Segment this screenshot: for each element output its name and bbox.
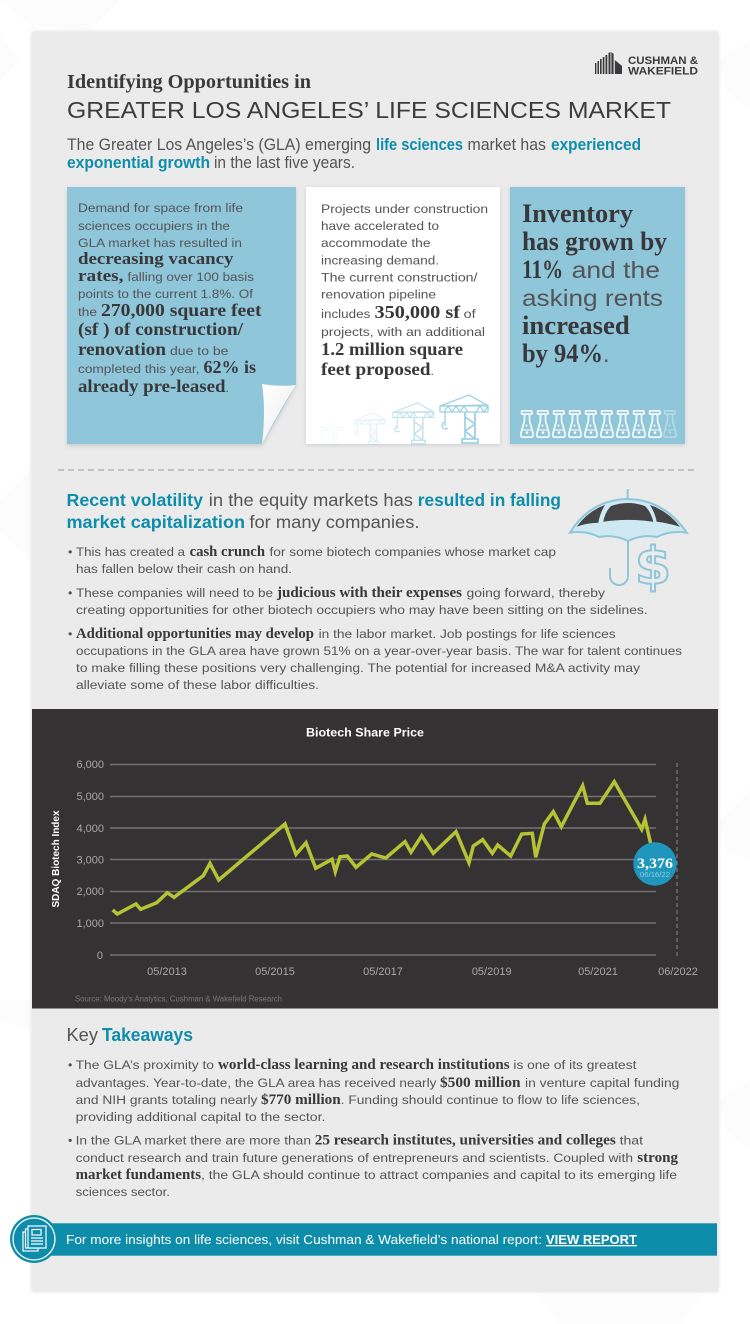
- logo: Cushman & Wakefield: [595, 52, 698, 78]
- panel: vacancy rates note: GLA market has resulted in: [78, 236, 242, 250]
- x axis labels: 05/2013: [147, 966, 187, 978]
- bulleted text: key takeaways: world-class learning and research institutions: [218, 1057, 510, 1073]
- panel: construction pipeline: includes: [321, 307, 370, 321]
- intro text: life sciences: [376, 135, 463, 154]
- bulleted text: market volatility points: •: [68, 545, 72, 559]
- panel: vacancy rates note: renovation: [78, 339, 166, 359]
- bulleted text: market volatility points: in the labor market. Job postings for life sciences: [319, 627, 616, 641]
- y axis gridlines and labels: [76, 759, 656, 962]
- chart panel: biotech share price: [32, 709, 718, 1008]
- bulleted text: key takeaways: and NIH grants totaling nearly: [76, 1093, 258, 1107]
- panel: vacancy rates note: (sf ) of construction/: [78, 319, 244, 339]
- panel: vacancy rates note: [67, 187, 296, 446]
- panel: construction pipeline: accommodate the: [321, 236, 431, 250]
- intro text: The Greater Los Angeles’s (GLA) emerging: [67, 135, 371, 154]
- heading: key takeaways: Key: [66, 1025, 98, 1045]
- bulleted text: key takeaways: •: [68, 1134, 72, 1148]
- bulleted text: key takeaways: . Funding should continue to flow to life sciences,: [341, 1093, 640, 1107]
- bulleted text: key takeaways: , the GLA should continue to attract companies and capital to its emerging life: [201, 1168, 677, 1182]
- intro text: in the last five years.: [214, 153, 355, 172]
- x axis labels: [147, 966, 698, 978]
- panel: inventory and rents: 11%: [522, 255, 563, 284]
- panel: inventory and rents: increased: [522, 311, 630, 340]
- bulleted text: key takeaways: $770 million: [261, 1092, 341, 1108]
- panel: vacancy rates note: falling over 100 basis: [128, 270, 254, 284]
- panel: construction pipeline: of: [464, 307, 476, 321]
- x axis labels: 05/2015: [255, 966, 295, 978]
- heading: recent volatility: market capitalization: [66, 512, 245, 532]
- x axis labels: 05/2021: [578, 966, 618, 978]
- callout: latest value: 06/16/22: [640, 870, 670, 879]
- heading: recent volatility: Recent volatility: [66, 490, 203, 510]
- panel: construction pipeline: .: [430, 364, 434, 378]
- panel: inventory and rents: .: [603, 341, 609, 367]
- panel: vacancy rates note: the: [78, 305, 97, 319]
- panel: construction pipeline: 350,000 sf: [374, 302, 460, 322]
- banner: view report: [10, 1215, 717, 1263]
- y axis gridlines and labels: 5,000: [76, 791, 104, 803]
- panel: vacancy rates note: decreasing vacancy: [78, 249, 234, 268]
- panel: construction pipeline: 1.2 million square: [321, 339, 463, 359]
- intro text: experienced: [551, 135, 641, 154]
- bulleted text: market volatility points: cash crunch: [190, 544, 265, 560]
- bulleted text: market volatility points: These companies will need to be: [76, 586, 273, 600]
- x axis labels: 05/2017: [363, 966, 403, 978]
- y axis gridlines and labels: 6,000: [76, 759, 104, 771]
- bulleted text: market volatility points: alleviate some of these labor difficulties.: [76, 678, 319, 692]
- banner: view report: VIEW REPORT: [546, 1232, 637, 1247]
- heading: recent volatility: resulted in falling: [418, 490, 561, 510]
- title: GREATER LOS ANGELES’ LIFE SCIENCES MARKET: [67, 97, 671, 123]
- icon: umbrella with dollar sign: $: [635, 537, 671, 597]
- bulleted text: key takeaways: conduct research and train future generations of entrepreneurs and scientists. Coupled with: [76, 1151, 633, 1165]
- logo: Cushman & Wakefield: WAKEFIELD: [628, 66, 698, 78]
- icon: report pages: [10, 1215, 58, 1263]
- panel: vacancy rates note: points to the current 1.8%. Of: [78, 287, 254, 301]
- bulleted text: market volatility points: •: [68, 627, 72, 641]
- panel: construction pipeline: renovation pipeline: [321, 288, 436, 302]
- heading: recent volatility: [66, 490, 561, 532]
- panel: vacancy rates note: sciences occupiers in the: [78, 219, 230, 233]
- icons: cranes: [320, 395, 488, 446]
- intro text: [67, 135, 641, 172]
- icon: umbrella with dollar sign: [570, 489, 687, 597]
- bulleted text: key takeaways: [68, 1057, 680, 1199]
- panel: vacancy rates note: .: [226, 381, 229, 395]
- panel: inventory and rents: by 94%: [522, 339, 603, 368]
- bulleted text: market volatility points: has fallen below their cash on hand.: [76, 562, 292, 576]
- bulleted text: market volatility points: [68, 544, 682, 692]
- panel: vacancy rates note: already pre-leased: [78, 376, 226, 396]
- y axis gridlines and labels: 0: [97, 950, 103, 962]
- panel: construction pipeline: Projects under construction: [321, 202, 488, 216]
- panel: vacancy rates note: 62% is: [204, 357, 256, 377]
- x axis labels: 05/2019: [472, 966, 512, 978]
- bulleted text: market volatility points: for some biotech companies whose market cap: [270, 545, 556, 559]
- line series: [113, 782, 651, 914]
- bulleted text: key takeaways: in venture capital funding: [525, 1076, 680, 1090]
- callout: latest value: 3,376: [637, 856, 674, 872]
- chart title: Biotech Share Price: [306, 726, 424, 740]
- y axis gridlines and labels: 2,000: [76, 886, 104, 898]
- heading: identifying opportunities: Identifying Opportunities in: [67, 71, 311, 93]
- intro text: exponential growth: [67, 153, 210, 172]
- heading: recent volatility: for many companies.: [249, 512, 420, 532]
- y axis gridlines and labels: 4,000: [76, 823, 104, 835]
- bulleted text: key takeaways: advantages. Year-to-date, the GLA area has received nearly: [76, 1076, 437, 1090]
- panel: construction pipeline: have accelerated to: [321, 219, 439, 233]
- bulleted text: market volatility points: •: [68, 586, 72, 600]
- panel: inventory and rents: asking rents: [522, 285, 663, 311]
- icons: flasks: [521, 411, 676, 437]
- bulleted text: key takeaways: providing additional capital to the sector.: [76, 1110, 325, 1124]
- panel: construction pipeline: projects, with an additional: [321, 325, 485, 339]
- bulleted text: market volatility points: Additional opportunities may develop: [76, 626, 314, 642]
- bulleted text: key takeaways: •: [68, 1058, 72, 1072]
- bulleted text: key takeaways: 25 research institutes, universities and colleges: [315, 1132, 616, 1148]
- panel: inventory and rents: has grown by: [522, 227, 667, 256]
- panel: vacancy rates note: rates,: [78, 266, 124, 285]
- x axis labels: 06/2022: [658, 966, 698, 978]
- heading: recent volatility: in the equity markets has: [209, 490, 413, 510]
- heading: key takeaways: Takeaways: [102, 1025, 193, 1045]
- panel: construction pipeline: increasing demand.: [321, 254, 439, 268]
- panel: construction pipeline: The current construction/: [321, 270, 478, 284]
- bulleted text: key takeaways: $500 million: [440, 1075, 521, 1091]
- y axis title: SDAQ Biotech Index: [50, 810, 62, 908]
- panel: inventory and rents: [510, 187, 685, 445]
- panel: vacancy rates note: 270,000 square feet: [101, 300, 262, 320]
- intro text: market has: [468, 135, 546, 154]
- y axis gridlines and labels: 3,000: [76, 854, 104, 866]
- bulleted text: market volatility points: going forward, thereby: [466, 586, 606, 600]
- banner: view report: For more insights on life sciences, visit Cushman & Wakefield’s national report:: [66, 1232, 542, 1247]
- bulleted text: key takeaways: strong: [637, 1150, 679, 1166]
- bulleted text: market volatility points: This has created a: [76, 545, 185, 559]
- bulleted text: market volatility points: creating opportunities for other biotech occupiers who may have been sitting on the sidelines.: [76, 603, 648, 617]
- bulleted text: key takeaways: In the GLA market there are more than: [76, 1134, 311, 1148]
- panel: vacancy rates note: due to be: [170, 344, 229, 358]
- bulleted text: key takeaways: sciences sector.: [76, 1185, 170, 1199]
- page curl: [262, 384, 296, 444]
- source note: Source: Moody’s Analytics, Cushman & Wakefield Research: [75, 994, 282, 1004]
- bulleted text: market volatility points: occupations in the GLA area have grown 51% on a year-over-year basis. The war for talent continues: [76, 644, 682, 658]
- bulleted text: key takeaways: is one of its greatest: [513, 1058, 637, 1072]
- panel: construction pipeline: [306, 187, 500, 446]
- panel: construction pipeline: feet proposed: [321, 359, 431, 379]
- panel: inventory and rents: and the: [572, 257, 660, 283]
- bulleted text: market volatility points: to make filling these positions very challenging. The potential for increased M&A activity may: [76, 661, 641, 675]
- bulleted text: key takeaways: The GLA’s proximity to: [76, 1058, 214, 1072]
- bulleted text: key takeaways: that: [620, 1134, 644, 1148]
- panel: vacancy rates note: Demand for space from life: [78, 201, 243, 215]
- logo: Cushman & Wakefield: CUSHMAN &: [628, 55, 698, 67]
- panel: inventory and rents: Inventory: [522, 199, 633, 228]
- y axis gridlines and labels: 1,000: [76, 918, 104, 930]
- bulleted text: market volatility points: judicious with their expenses: [276, 585, 462, 601]
- callout: latest value: [633, 842, 677, 886]
- panel: vacancy rates note: completed this year,: [78, 362, 200, 376]
- bulleted text: key takeaways: market fundaments: [76, 1167, 201, 1183]
